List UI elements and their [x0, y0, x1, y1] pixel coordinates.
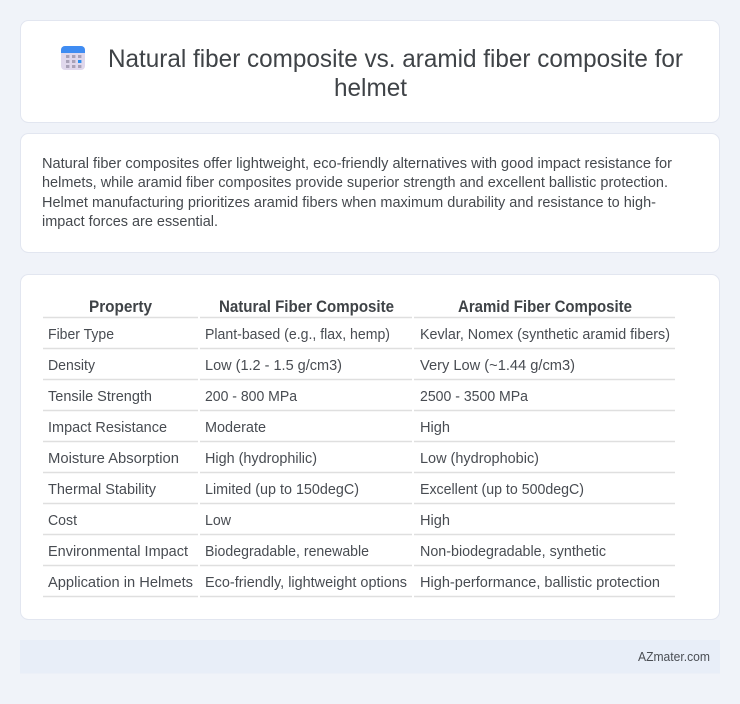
table row: tensile strength: Tensile Strength	[48, 388, 152, 405]
footer bar	[20, 640, 720, 674]
table header row: Natural Fiber Composite	[219, 298, 394, 316]
table row: density: Very Low (~1.44 g/cm3)	[420, 357, 575, 374]
table row: cost: High	[420, 512, 450, 529]
table row: cost: Low	[205, 512, 231, 529]
panel: summary paragraph	[20, 134, 720, 252]
panel: comparison table	[20, 274, 720, 620]
table row: fiber type: Fiber Type	[48, 326, 114, 343]
table row: application in helmets: High-performance, ballistic protection	[420, 574, 660, 591]
table row: cost: Cost	[48, 512, 78, 529]
table row: application in helmets: Application in Helmets	[48, 574, 193, 591]
panel: title header	[20, 20, 720, 122]
table row: tensile strength	[43, 388, 675, 410]
table row: fiber type	[43, 326, 675, 348]
text block: summary	[42, 155, 672, 230]
table row: density: Density	[48, 357, 95, 374]
table row: fiber type: Plant-based (e.g., flax, hemp)	[205, 326, 390, 343]
footer bar: AZmater.com	[638, 650, 710, 664]
title: helmet	[334, 74, 407, 102]
table row: environmental impact: Non-biodegradable, synthetic	[420, 543, 606, 560]
table row: tensile strength: 2500 - 3500 MPa	[420, 388, 529, 405]
table row: fiber type: Kevlar, Nomex (synthetic aramid fibers)	[420, 326, 670, 343]
table row: environmental impact: Biodegradable, renewable	[205, 543, 369, 560]
table row: impact resistance: Impact Resistance	[48, 419, 167, 436]
table row: thermal stability	[43, 481, 675, 504]
table row: impact resistance: High	[420, 419, 450, 436]
title: Natural fiber composite vs. aramid fiber composite for	[108, 45, 683, 73]
table row: moisture absorption: Moisture Absorption	[48, 450, 179, 467]
table row: application in helmets: Eco-friendly, lightweight options	[205, 574, 407, 591]
title	[108, 45, 683, 102]
table row: environmental impact	[43, 543, 675, 566]
table row: moisture absorption: High (hydrophilic)	[205, 450, 317, 467]
table row: environmental impact: Environmental Impact	[48, 543, 189, 560]
table row: moisture absorption: Low (hydrophobic)	[420, 450, 539, 467]
text block: summary: helmets, while aramid fiber composites provide superior strength and excellent ballistic protection.	[42, 174, 668, 191]
table row: impact resistance	[43, 419, 675, 442]
text block: summary: Helmet manufacturing prioritizes aramid fibers when maximum durability and resistance to high-	[42, 194, 656, 211]
table row: density	[43, 357, 675, 380]
table row: thermal stability: Limited (up to 150degC)	[205, 481, 359, 498]
table row: moisture absorption	[43, 450, 675, 472]
table row: thermal stability: Thermal Stability	[48, 481, 156, 498]
text block: summary: Natural fiber composites offer lightweight, eco-friendly alternatives with good impact resistance for	[42, 155, 672, 172]
text block: summary: impact forces are essential.	[42, 213, 218, 230]
table header row: Property	[89, 298, 152, 316]
table row: density: Low (1.2 - 1.5 g/cm3)	[205, 357, 342, 374]
table row: tensile strength: 200 - 800 MPa	[205, 388, 298, 405]
icon: calendar	[61, 46, 85, 70]
table header row: Aramid Fiber Composite	[458, 298, 632, 316]
table row: cost	[43, 512, 675, 534]
table header row	[43, 298, 675, 318]
table row: application in helmets	[43, 574, 675, 596]
table row: thermal stability: Excellent (up to 500degC)	[420, 481, 584, 498]
table row: impact resistance: Moderate	[205, 419, 266, 436]
